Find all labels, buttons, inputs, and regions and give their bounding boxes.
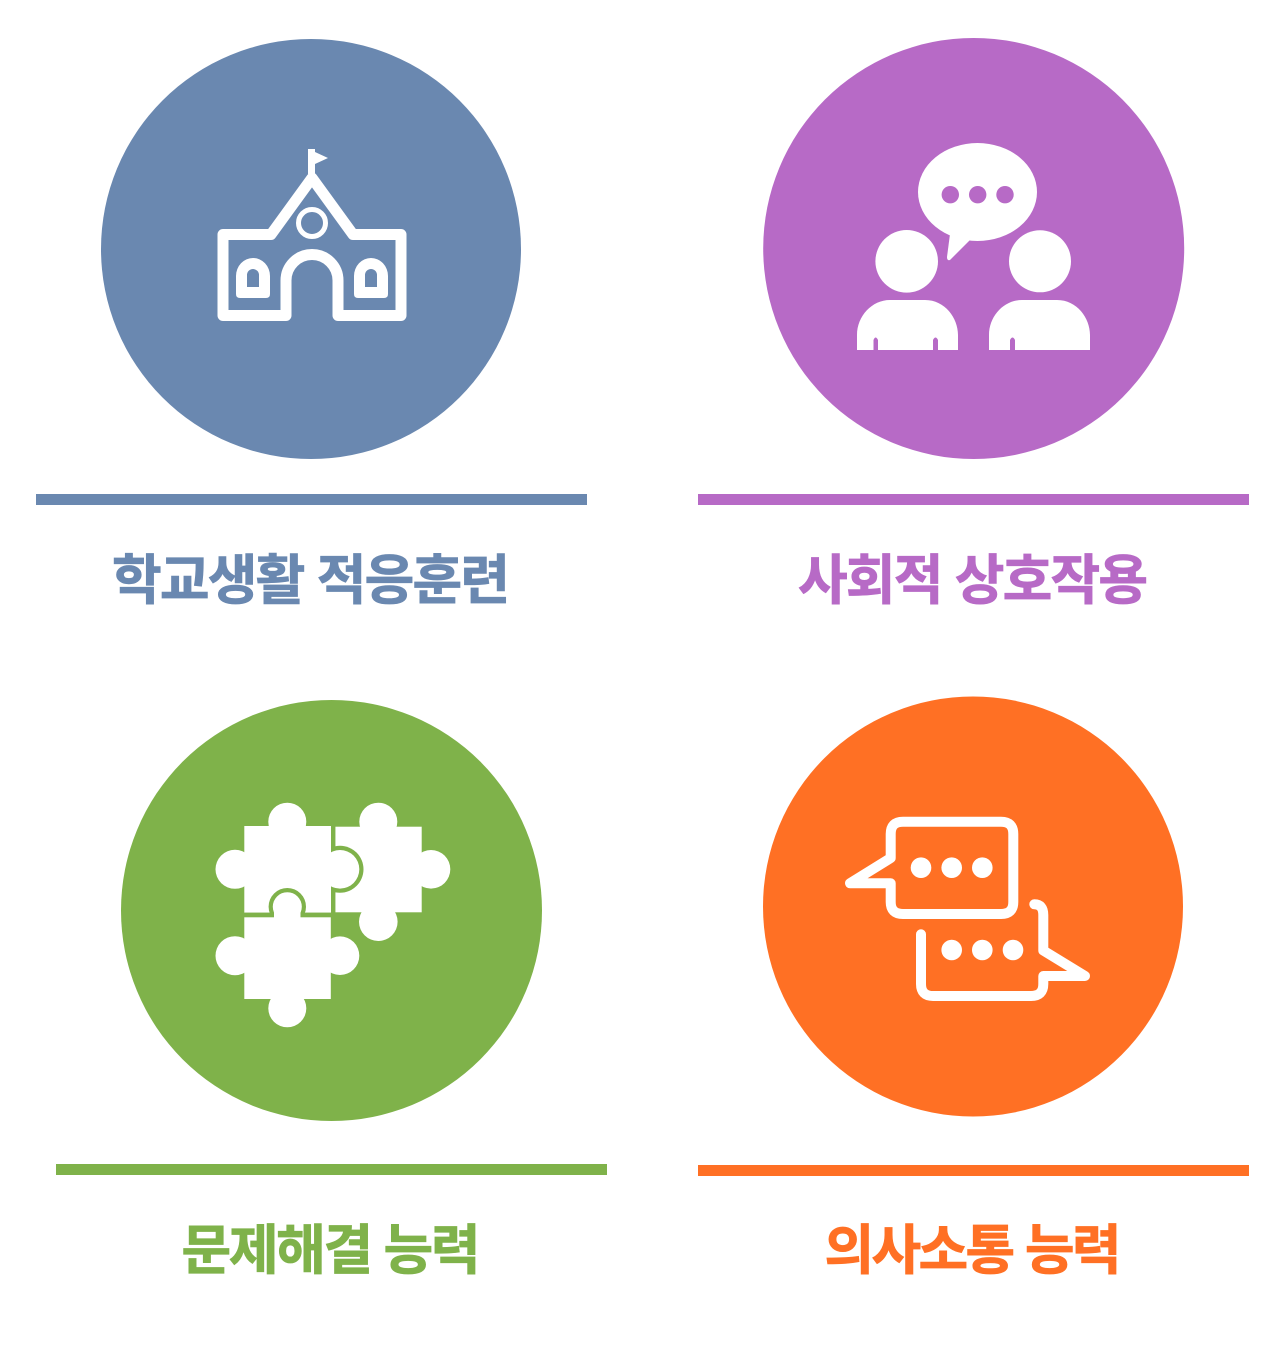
panel: social interaction: [698, 38, 1249, 611]
circle badge: purple: [763, 38, 1184, 459]
heading: communication: 의사소통 능력: [824, 1221, 1122, 1281]
panel: school adaptation: [36, 39, 587, 611]
heading: social interaction: 사회적 상호작용: [798, 551, 1148, 611]
panel: communication: [698, 696, 1249, 1281]
divider bar: orange: [698, 1165, 1249, 1176]
circle badge: blue: [101, 39, 521, 459]
circle badge: orange: [763, 696, 1183, 1116]
heading: school adaptation: 학교생활 적응훈련: [112, 551, 510, 611]
icon: school building: [223, 149, 401, 316]
circle badge: green: [121, 700, 542, 1121]
divider bar: blue: [36, 494, 587, 505]
heading: problem solving: 문제해결 능력: [182, 1221, 480, 1281]
icon: two people talking: [857, 143, 1090, 350]
icon: puzzle pieces: [216, 803, 450, 1027]
divider bar: green: [56, 1164, 607, 1175]
icon: two speech bubbles: [850, 822, 1085, 996]
panel: problem solving: [56, 700, 607, 1281]
divider bar: purple: [698, 494, 1249, 505]
